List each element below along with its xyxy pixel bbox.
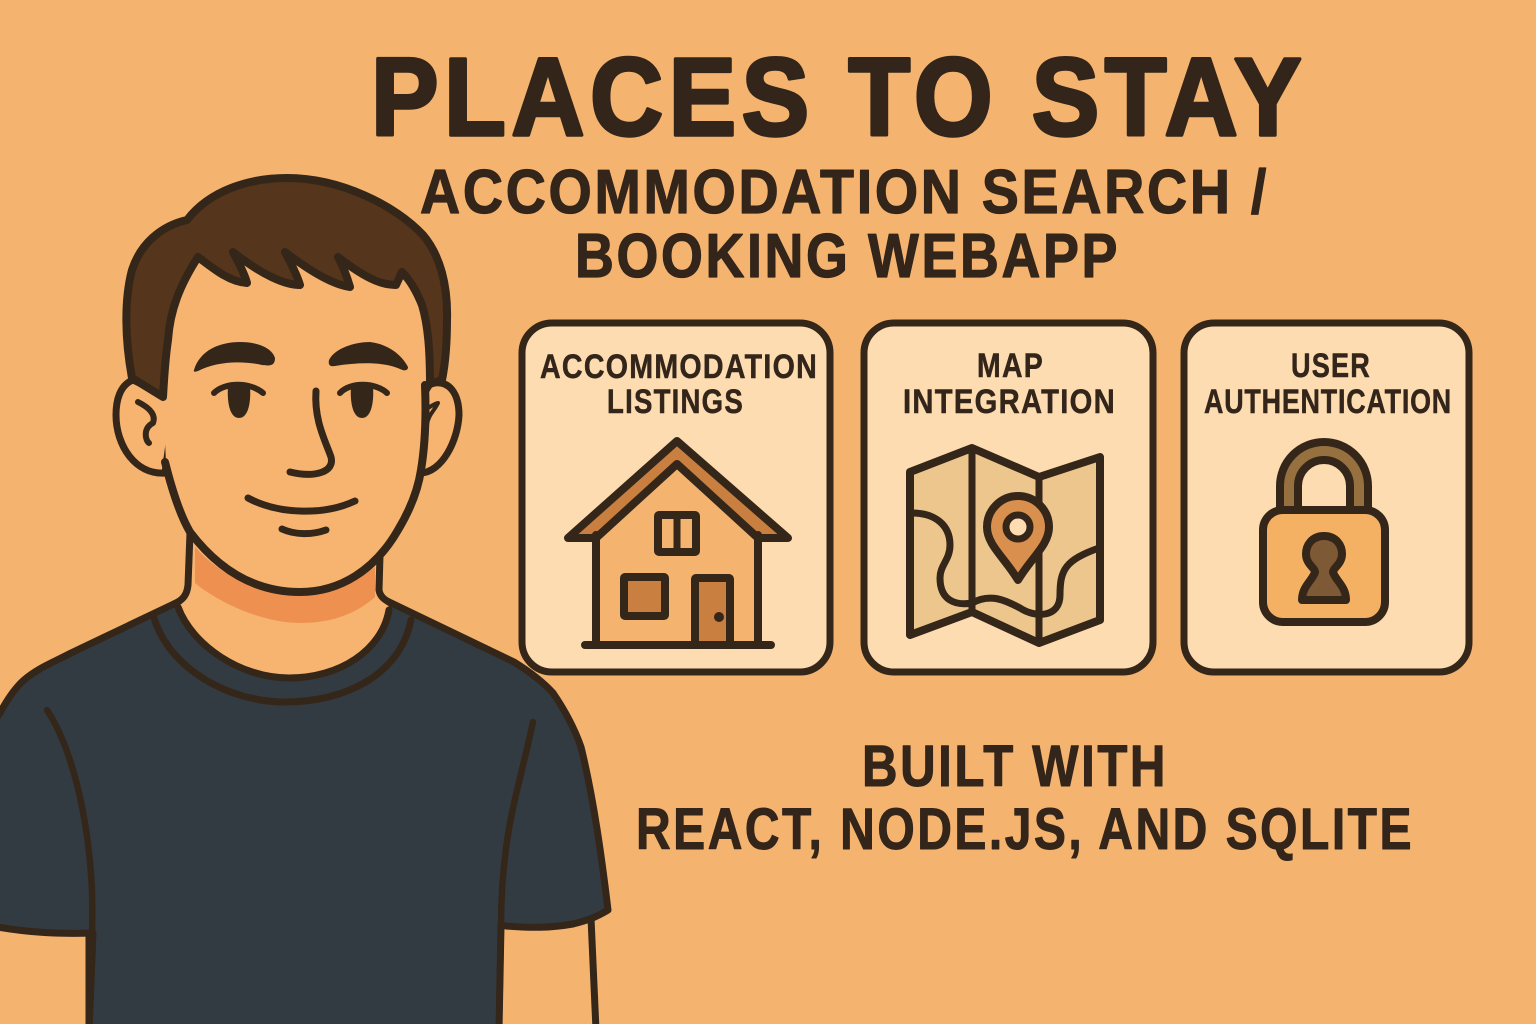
subtitle: BOOKING WEBAPP: [575, 222, 1120, 291]
tech stack text: [636, 734, 1414, 862]
icon: house: [568, 441, 788, 645]
heading: accommodation listings: [540, 348, 818, 421]
heading: user authentication: USER: [1291, 347, 1371, 385]
panel: user authentication: [1184, 323, 1469, 672]
nose: [290, 391, 332, 474]
heading: user authentication: AUTHENTICATION: [1204, 383, 1452, 421]
heading: map integration: [903, 347, 1116, 421]
icon: folded map with pin: [910, 448, 1100, 643]
person illustration: [0, 178, 608, 1024]
collar: [154, 607, 411, 702]
heading: user authentication: [1204, 347, 1452, 421]
eyebrows: [194, 342, 408, 372]
hair: [126, 178, 447, 397]
subtitle: [420, 158, 1269, 291]
tech stack text: BUILT WITH: [862, 734, 1168, 799]
ears: [116, 380, 459, 473]
panel: map integration: [864, 323, 1153, 672]
heading: accommodation listings: LISTINGS: [607, 383, 744, 421]
panel: accommodation listings: [522, 323, 830, 672]
neck: [174, 530, 392, 678]
t-shirt: [0, 600, 608, 1024]
face: [163, 250, 427, 592]
heading: accommodation listings: ACCOMMODATION: [540, 348, 818, 386]
mouth: [248, 498, 355, 534]
heading: map integration: INTEGRATION: [903, 383, 1116, 421]
heading: map integration: MAP: [977, 347, 1044, 385]
icon: padlock: [1263, 442, 1385, 622]
arms: [0, 918, 596, 1024]
subtitle: ACCOMMODATION SEARCH /: [420, 158, 1269, 227]
title: PLACES TO STAY: [371, 36, 1307, 159]
eyes: [214, 385, 387, 418]
